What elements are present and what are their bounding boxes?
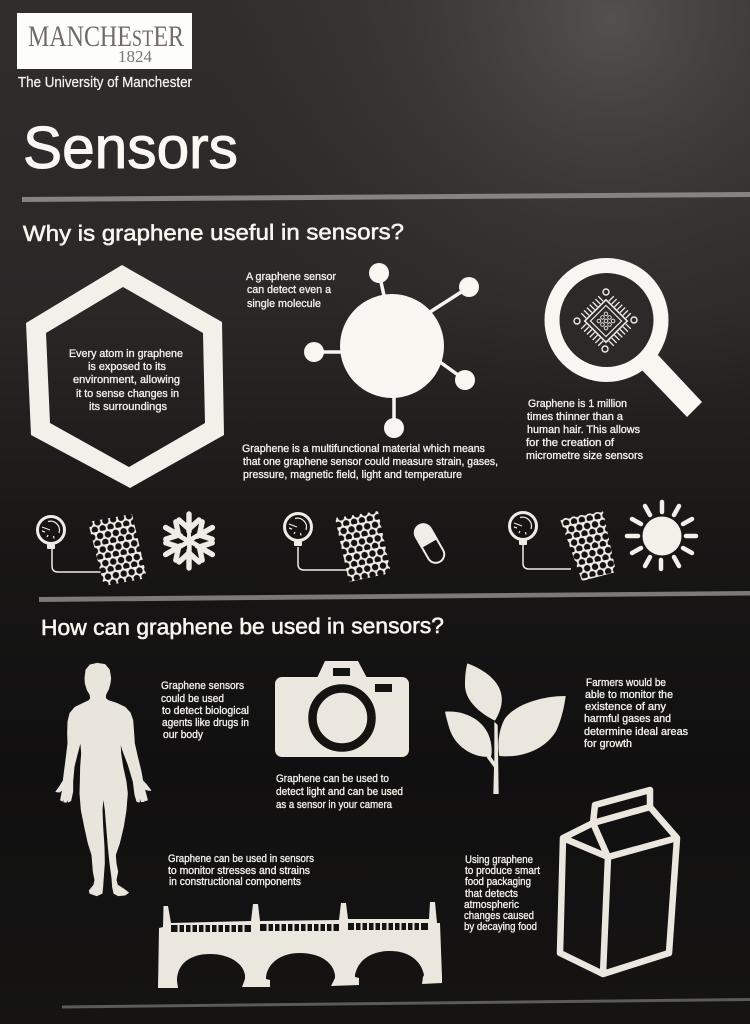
text: multifunctional: that one graphene sensor could measure strain, gases, <box>243 456 498 468</box>
text: bridge: Graphene can be used in sensors <box>168 853 314 865</box>
text: multifunctional: Graphene is a multifunctional material which means <box>242 443 485 455</box>
text: single molecule: single molecule <box>247 298 321 310</box>
text: camera: as a sensor in your camera <box>276 799 393 811</box>
text: biological agents: Graphene sensors <box>161 680 244 692</box>
heading: how graphene: How can graphene be used in sensors? <box>41 613 444 640</box>
panel: hexagon atom: it to sense changes in <box>76 388 179 400</box>
icon: chip <box>573 288 639 354</box>
text: biological agents <box>161 680 249 741</box>
panel: hexagon atom: Every atom in graphene <box>69 348 183 360</box>
title: Sensors <box>23 115 238 181</box>
text: biological agents: to detect biological <box>162 705 249 717</box>
text: multifunctional <box>242 443 498 481</box>
text: single molecule: can detect even a <box>247 284 332 296</box>
text: biological agents: could be used <box>161 693 224 705</box>
icon: camera <box>275 661 409 757</box>
icon: human body <box>56 663 151 896</box>
text: bridge: to monitor stresses and strains <box>168 865 310 877</box>
text: bridge: in constructional components <box>169 876 301 888</box>
text: food packaging: changes caused <box>464 910 534 922</box>
icon: bridge <box>158 902 442 988</box>
icon: milk carton <box>560 790 677 974</box>
icon: sensor with sun <box>510 502 696 581</box>
text: food packaging <box>464 854 540 933</box>
icon: snowflake <box>161 514 217 568</box>
text: farmers: for growth <box>584 738 632 750</box>
text: farmers: existence of any <box>585 701 667 713</box>
text: farmers: harmful gases and <box>584 713 671 725</box>
text: biological agents: agents like drugs in <box>162 717 249 729</box>
text: biological agents: our body <box>163 729 203 741</box>
icon: molecule <box>304 263 479 438</box>
text: camera: Graphene can be used to <box>276 773 389 785</box>
icon: magnifying glass with chip <box>552 266 702 417</box>
logo: MANCHESTER <box>28 20 184 53</box>
text: 1 million times thinner: times thinner than a <box>527 411 624 423</box>
text: food packaging: atmospheric <box>464 899 519 911</box>
text: bridge <box>168 853 314 888</box>
text: multifunctional: pressure, magnetic field, light and temperature <box>243 469 462 481</box>
text: farmers: Farmers would be <box>586 677 666 689</box>
text: farmers: determine ideal areas <box>584 726 688 738</box>
text: food packaging: food packaging <box>465 876 531 888</box>
icon: sun <box>627 502 696 569</box>
text: 1 million times thinner: micrometre size sensors <box>526 450 643 462</box>
text: single molecule: A graphene sensor <box>246 271 336 283</box>
logo <box>17 13 192 91</box>
text: 1 million times thinner <box>526 398 643 462</box>
text: single molecule <box>246 271 336 310</box>
panel: hexagon atom: is exposed to its <box>88 361 166 373</box>
text: food packaging: to produce smart <box>465 865 540 877</box>
heading: why graphene: Why is graphene useful in sensors? <box>23 219 404 246</box>
text: farmers <box>584 677 688 750</box>
panel: hexagon atom: its surroundings <box>89 401 167 413</box>
text: food packaging: that detects <box>465 888 518 900</box>
icon: plant <box>445 663 566 794</box>
icon: capsule <box>411 520 448 566</box>
logo: The University of Manchester <box>18 74 192 91</box>
text: camera: detect light and can be used <box>276 786 403 798</box>
text: camera <box>276 773 403 811</box>
text: 1 million times thinner: for the creation of <box>526 437 615 449</box>
text: 1 million times thinner: human hair. This allows <box>527 424 640 436</box>
logo: 1824 <box>118 47 152 66</box>
icon: sensor with capsule <box>284 511 448 582</box>
panel: hexagon atom <box>26 265 224 488</box>
text: farmers: able to monitor the <box>585 689 673 701</box>
icon: sensor with snowflake <box>38 514 217 586</box>
panel: hexagon atom: environment, allowing <box>73 374 180 386</box>
text: food packaging: Using graphene <box>465 854 533 866</box>
text: 1 million times thinner: Graphene is 1 million <box>528 398 627 410</box>
text: food packaging: by decaying food <box>464 921 537 933</box>
